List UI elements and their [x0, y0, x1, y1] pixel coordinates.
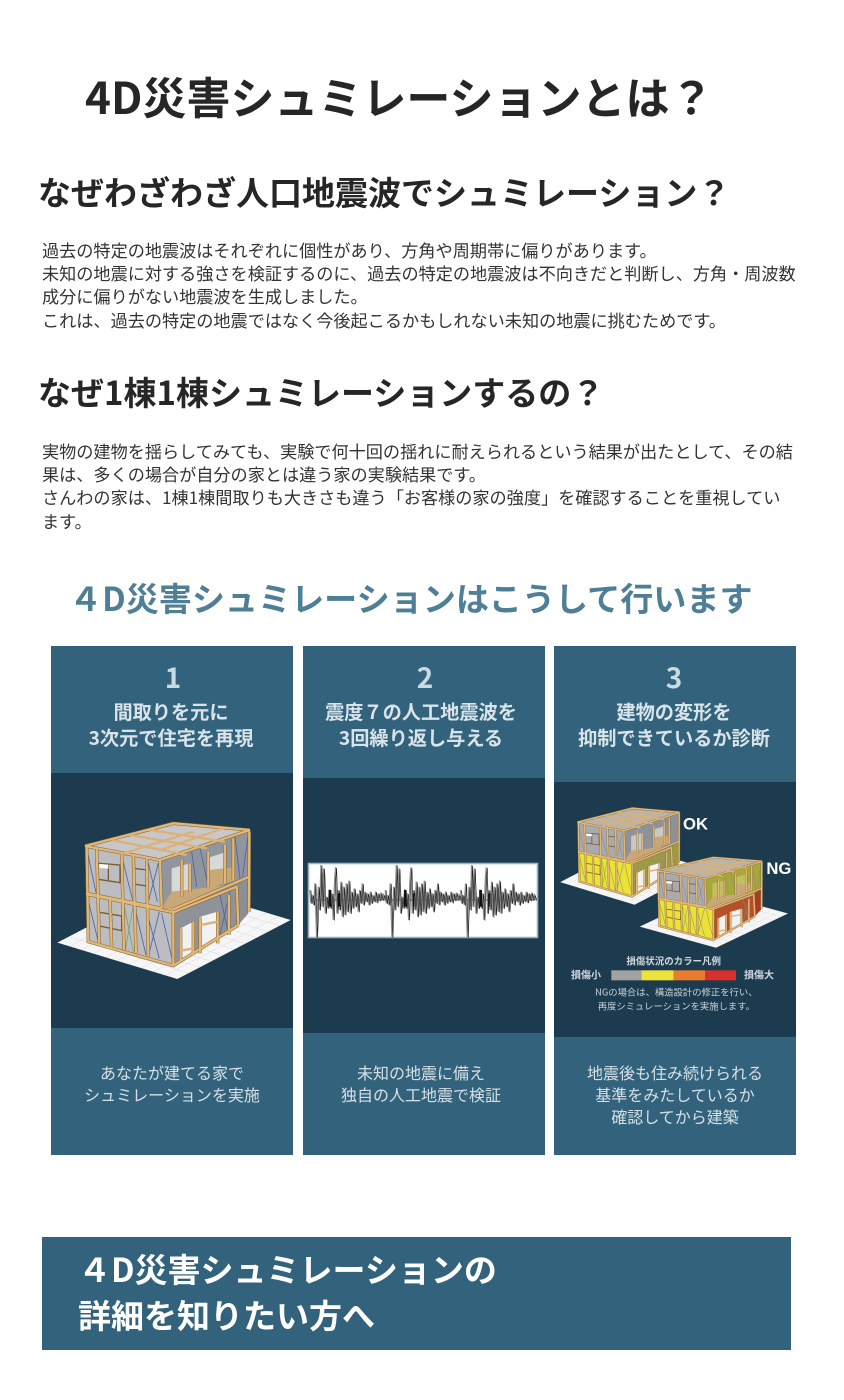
text block: why artificial waves: 成分に偏りがない地震波を生成しました。 — [42, 283, 368, 308]
legend title: 損傷状況のカラー凡例 — [626, 953, 721, 967]
step 2 heading — [325, 696, 517, 751]
section heading: ４D災害シュミレーションはこうして行います — [69, 573, 753, 621]
step 2 heading: 3回繰り返し与える — [339, 723, 503, 751]
text block: why each building: 果は、多くの場合が自分の家とは違う家の実験結果です。 — [42, 461, 486, 486]
banner text line 1: ４D災害シュミレーションの — [78, 1244, 497, 1292]
step 2 heading: 震度７の人工地震波を — [325, 696, 517, 724]
step number 3: 3 — [666, 657, 682, 697]
heading: why each building: なぜ1棟1棟シュミレーションするの？ — [38, 367, 604, 415]
panel: step 3 — [554, 646, 796, 1155]
text block: why each building: さんわの家は、1棟1棟間取りも大きさも違う「お客様の家の強度」を確認することを重視してい — [42, 484, 780, 509]
banner text line 2: 詳細を知りたい方へ — [78, 1290, 375, 1338]
title: 4D災害シュミレーションとは？ — [85, 63, 714, 127]
image panel: 3D house model — [51, 773, 293, 1028]
step 3 heading: 建物の変形を — [616, 696, 732, 724]
step 1 heading — [89, 696, 254, 751]
step 2 caption — [341, 1060, 501, 1106]
image panel: seismic waveform — [303, 778, 545, 1033]
panel: step 2 — [303, 646, 545, 1155]
legend: damage colour scale: 損傷大 — [744, 967, 774, 982]
step 3 caption: 地震後も住み続けられる — [587, 1060, 763, 1084]
legend: damage colour scale — [571, 967, 774, 982]
label NG: NG — [766, 859, 791, 878]
step 1 caption: シュミレーションを実施 — [84, 1082, 260, 1106]
step 3 caption — [587, 1060, 763, 1128]
text block: why artificial waves — [42, 237, 796, 332]
step 1 caption — [84, 1060, 260, 1106]
text block: why artificial waves: これは、過去の特定の地震ではなく今後起こるかもしれない未知の地震に挑むためです。 — [42, 307, 726, 332]
text block: why each building: 実物の建物を揺らしてみても、実験で何十回の揺れに耐えられるという結果が出たとして、その結 — [42, 438, 793, 463]
icon: NG house — [640, 857, 788, 948]
step 3 caption: 確認してから建築 — [611, 1104, 739, 1128]
chart: waveform — [308, 864, 538, 938]
step 1 caption: あなたが建てる家で — [100, 1060, 244, 1084]
heading: why artificial waves: なぜわざわざ人口地震波でシュミレーション？ — [38, 167, 730, 215]
legend note: NGの場合は、構造設計の修正を行い、 — [595, 984, 758, 998]
panel: step 1 — [51, 646, 293, 1155]
step number 1: 1 — [165, 657, 181, 697]
text block: why artificial waves: 未知の地震に対する強さを検証するのに、過去の特定の地震波は不向きだと判断し、方角・周波数 — [42, 260, 796, 285]
step 1 heading: 間取りを元に — [113, 696, 229, 724]
text block: why each building — [42, 438, 793, 533]
legend: damage colour scale: 損傷小 — [571, 967, 601, 982]
step 2 caption: 独自の人工地震で検証 — [341, 1082, 501, 1106]
step 3 heading — [578, 696, 770, 751]
step number 2: 2 — [417, 657, 433, 697]
icon: house model — [57, 823, 291, 979]
step 2 caption: 未知の地震に備え — [357, 1060, 485, 1084]
text block: why artificial waves: 過去の特定の地震波はそれぞれに個性があり、方角や周期帯に偏りがあります。 — [42, 237, 657, 262]
step 3 caption: 基準をみたしているか — [595, 1082, 755, 1106]
text block: why each building: ます。 — [42, 508, 92, 533]
call to action banner — [42, 1237, 791, 1350]
step 1 heading: 3次元で住宅を再現 — [89, 723, 253, 751]
image panel: damage diagnosis — [554, 782, 796, 1037]
icon: OK house — [560, 808, 705, 905]
step 3 heading: 抑制できているか診断 — [578, 723, 770, 751]
label OK: OK — [683, 814, 708, 833]
image panel: damage diagnosis: 再度シミュレーションを実施します。 — [598, 998, 755, 1012]
